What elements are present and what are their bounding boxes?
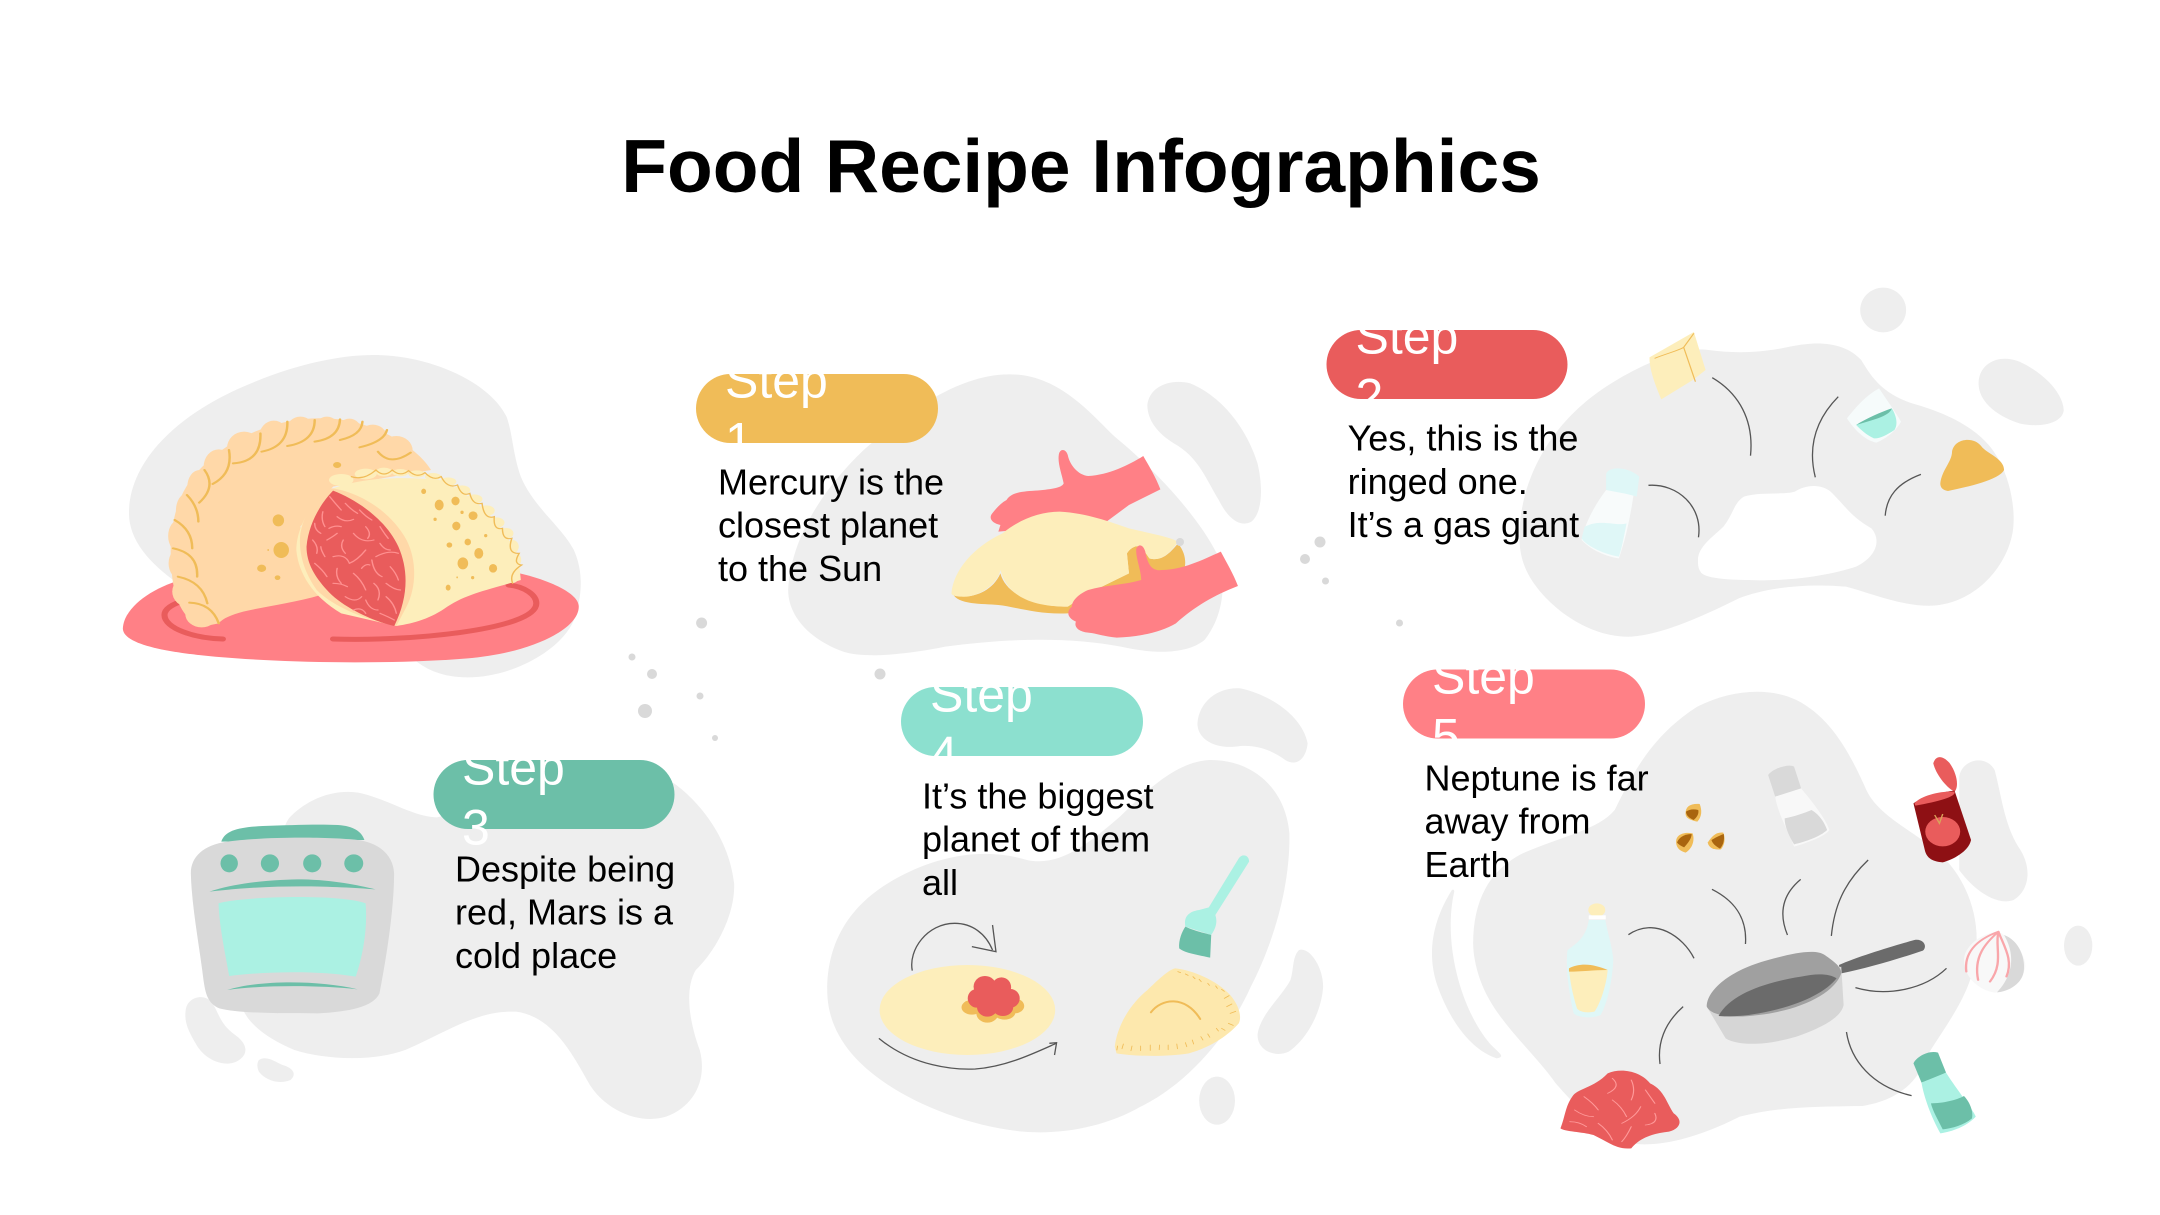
step 4 text: It’s the biggest [922,775,1154,816]
step 1 pill [696,374,938,443]
step 3 text: Despite being [455,848,675,889]
step 3 label: Step [462,739,565,795]
step 2 label: 2 [1356,368,1383,424]
step 2 illustration [1519,288,2064,637]
step 1 text: closest planet [718,505,938,546]
step 1 illustration [788,374,1261,655]
panel: step 1 kneading [696,352,1261,655]
step 2 pill [1326,330,1568,399]
back pastry [168,417,431,627]
step 2 text: It’s a gas giant [1348,504,1579,545]
front pastry with meat filling [296,468,522,626]
step 4 label: Step [930,666,1033,722]
step 5 label: Step [1432,648,1535,704]
step 3 text: red, Mars is a [455,892,674,933]
step 2 text: ringed one. [1348,461,1528,502]
step 5 text: Earth [1424,844,1511,885]
panel: step 3 oven [185,739,734,1119]
step 5 label: 5 [1432,708,1460,764]
panel: step 2 ingredients [1326,288,2064,637]
step 1 text: to the Sun [718,548,882,589]
background blob [129,355,581,677]
step 3 illustration [185,770,734,1119]
step 5 text: away from [1424,801,1591,842]
step 5 text: Neptune is far [1424,757,1649,798]
panel: step 4 folding [827,666,1323,1132]
step 3 text: cold place [455,935,617,976]
step 2 text: Yes, this is the [1348,418,1578,459]
step 4 illustration [827,688,1323,1132]
step 1 label: Step [725,352,828,408]
step 3 pill [434,760,674,829]
scattered dots [628,536,1403,741]
panel: step 5 pan and ingredients [1403,648,2092,1149]
step 4 text: all [922,862,958,903]
step 2 label: Step [1356,308,1458,364]
step 5 illustration [1432,692,2092,1149]
plate [123,573,579,662]
step 4 text: planet of them [922,819,1150,860]
title: Food Recipe Infographics [621,124,1541,208]
step 3 label: 3 [462,799,490,855]
panel: finished pastry on plate [123,355,581,677]
step 1 text: Mercury is the [718,461,944,502]
step 4 pill [901,687,1143,756]
step 4 label: 4 [930,726,958,782]
step 5 pill [1403,670,1645,738]
step 1 label: 1 [725,412,753,468]
